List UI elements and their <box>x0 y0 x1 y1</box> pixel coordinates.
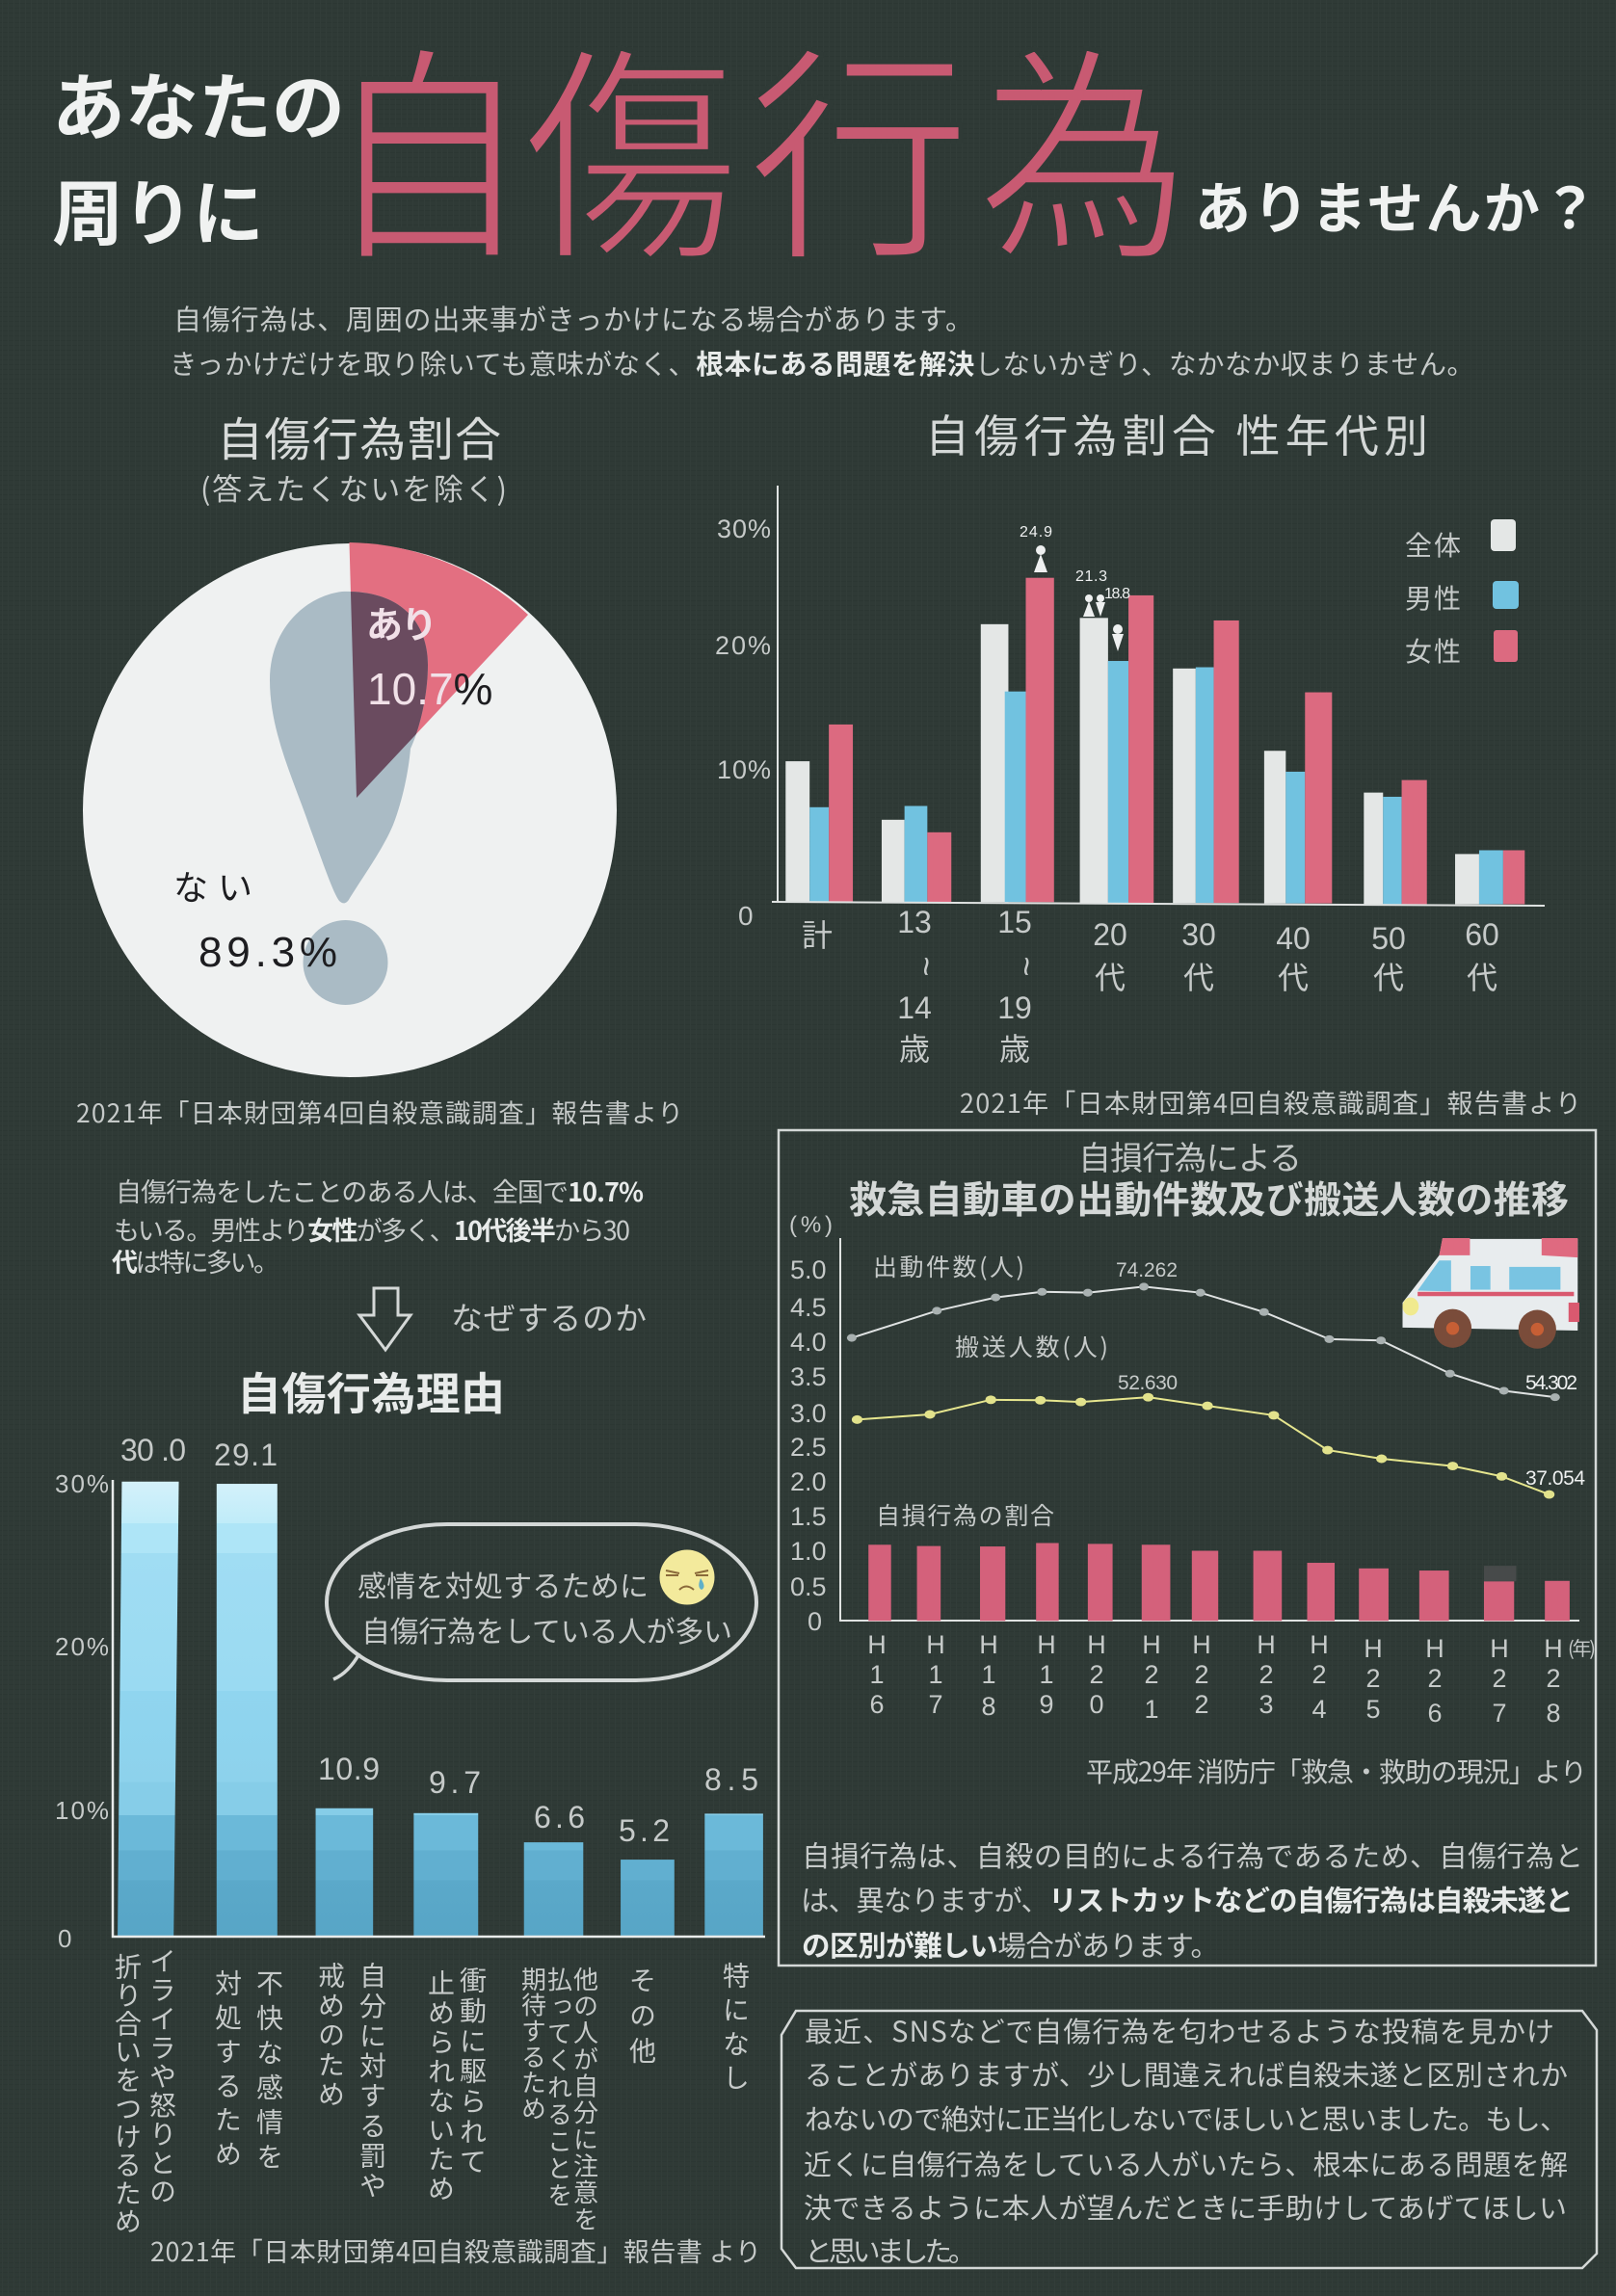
y axis labels: 4.5 <box>790 1293 827 1322</box>
x axis labels: 1 <box>869 1660 885 1689</box>
bars <box>118 1482 763 1937</box>
x axis labels: 2 <box>1258 1660 1274 1689</box>
category labels: 19 <box>997 990 1032 1025</box>
bubble text: 自傷行為をしている人が多い <box>361 1608 732 1650</box>
value labels: 9.7 <box>429 1765 481 1800</box>
category labels: 不快な感情を <box>251 1969 289 2170</box>
panel body text: 自損行為は、自殺の目的による行為であるため、自傷行為と <box>802 1834 1583 1875</box>
category labels: 自分に対する罰や <box>354 1962 392 2199</box>
panel body text: の区別が難しい場合があります。 <box>802 1924 1219 1965</box>
x axis labels: 8 <box>1546 1699 1561 1728</box>
category labels: 折り合いをつけるため <box>109 1953 147 2234</box>
panel: author comment <box>782 2010 1597 2270</box>
panel title: 救急自動車の出動件数及び搬送人数の推移 <box>849 1171 1569 1225</box>
heading: age chart: 自傷行為割合 性年代別 <box>925 402 1428 465</box>
x axis labels: 2 <box>1427 1664 1443 1693</box>
panel: ambulance dispatch <box>779 1130 1596 1966</box>
value labels <box>120 1433 758 1848</box>
pie label: no: ない <box>173 860 252 910</box>
y axis labels: 10% <box>717 755 771 784</box>
x axis labels: H <box>1087 1630 1106 1659</box>
category labels: 30 <box>1181 917 1216 952</box>
y axis labels: 30% <box>55 1469 109 1498</box>
comment text <box>804 2010 1568 2270</box>
category labels: 60 <box>1465 917 1499 952</box>
x axis labels: 2 <box>1546 1664 1561 1693</box>
category labels <box>802 905 1499 1069</box>
category labels: その他 <box>623 1966 662 2064</box>
x unit: (年) <box>1568 1633 1596 1661</box>
x axis labels: H <box>1192 1630 1211 1659</box>
peak value callouts: 24.9 <box>1020 524 1052 541</box>
source: pie: 2021年「日本財団第4回自殺意識調査」報告書より <box>76 1093 683 1130</box>
icon: exclamation mark <box>270 592 428 1005</box>
text: why: なぜするのか <box>451 1293 647 1339</box>
category labels: 歳 <box>899 1025 930 1069</box>
y axis labels: 0 <box>58 1924 71 1953</box>
source: reasons chart: 2021年「日本財団第4回自殺意識調査」報告書 より <box>150 2231 761 2269</box>
axes <box>840 1238 1579 1621</box>
panel title <box>849 1132 1569 1225</box>
y axis labels: 1.5 <box>790 1502 827 1531</box>
y unit: (%) <box>789 1212 833 1238</box>
y axis labels: 4.0 <box>790 1328 827 1357</box>
category labels: イライラや怒りとの <box>144 1947 182 2204</box>
comment text: ねないので絶対に正当化しないでほしいと思いました。もし、 <box>805 2098 1568 2138</box>
panel source: 平成29年 消防庁「救急・救助の現況」より <box>1086 1752 1587 1790</box>
pie label: yes: 10.7% <box>367 664 492 714</box>
x axis labels: 3 <box>1258 1690 1274 1719</box>
category labels: 40 <box>1276 921 1311 956</box>
comment text: 最近、SNSなどで自傷行為を匂わせるような投稿を見かけ <box>805 2010 1554 2050</box>
x axis labels: 2 <box>1492 1664 1507 1693</box>
x axis labels <box>867 1630 1563 1728</box>
x axis labels: 1 <box>928 1660 943 1689</box>
x axis labels: 8 <box>981 1692 996 1721</box>
value labels: 8.5 <box>704 1762 758 1797</box>
heading: reasons: 自傷行為理由 <box>237 1359 505 1423</box>
category labels: 払ってくれることを <box>542 1966 578 2207</box>
line and bar series <box>847 1282 1570 1621</box>
y axis labels: 3.0 <box>790 1399 827 1428</box>
y axis labels: 3.5 <box>790 1362 827 1391</box>
comment text: 決できるように本人が望んだときに手助けしてあげてほしい <box>804 2186 1567 2227</box>
y axis labels: 5.0 <box>790 1255 827 1284</box>
y axis labels: 20% <box>55 1632 109 1661</box>
x axis labels: 2 <box>1089 1660 1104 1689</box>
category labels: 止められないため <box>422 1969 461 2202</box>
series labels: 出動件数(人) <box>873 1249 1024 1283</box>
heading: pie <box>200 402 507 509</box>
y axis labels: 10% <box>55 1796 109 1825</box>
peak value callouts: 21.3 <box>1075 568 1107 585</box>
value labels: 52.630 <box>1118 1372 1178 1394</box>
x axis labels: 1 <box>1039 1660 1054 1689</box>
category labels: 期待するため <box>517 1966 551 2121</box>
legend <box>1405 519 1519 670</box>
peak value callouts: 18.8 <box>1104 586 1130 602</box>
category labels: 14 <box>897 990 932 1025</box>
bars <box>785 578 1524 904</box>
category labels: 対処するため <box>209 1969 248 2167</box>
pie label: no: 89.3% <box>199 929 337 976</box>
x axis labels: 6 <box>869 1690 885 1719</box>
comment frame <box>782 2011 1597 2268</box>
x axis labels: 2 <box>1144 1660 1159 1689</box>
comment text: ることがありますが、少し間違えれば自殺未遂と区別されか <box>805 2053 1568 2094</box>
x axis labels: H <box>1142 1630 1161 1659</box>
intro text: きっかけだけを取り除いても意味がなく、根本にある問題を解決しないかぎり、なかなか収まりません。 <box>170 343 1474 383</box>
panel body text: は、異なりますが、リストカットなどの自傷行為は自殺未遂と <box>801 1879 1574 1919</box>
heading: pie: 自傷行為割合 <box>217 402 501 469</box>
arrow: down <box>359 1288 411 1350</box>
intro text <box>170 298 1474 383</box>
title main: 自傷行為 <box>326 0 1190 306</box>
pie: yes slice <box>349 542 528 798</box>
x axis labels: H <box>1364 1634 1383 1663</box>
bubble text: 感情を対処するために <box>358 1563 649 1605</box>
x axis labels: 5 <box>1365 1695 1381 1724</box>
value labels: 37.054 <box>1525 1467 1585 1490</box>
panel title: 自損行為による <box>1078 1132 1302 1179</box>
heading: pie: (答えたくないを除く) <box>200 465 507 509</box>
value labels: 74.262 <box>1116 1259 1178 1281</box>
category labels: 15 <box>997 905 1032 939</box>
pie label: yes: あり <box>366 595 437 648</box>
category labels: 衝動に駆られて <box>454 1966 492 2175</box>
value labels: 54.302 <box>1525 1372 1577 1394</box>
x axis labels: 7 <box>1492 1699 1507 1728</box>
y axis labels: 2.5 <box>790 1433 827 1462</box>
title lead: あなたの: あなたの <box>52 49 345 155</box>
category labels: 代 <box>1183 954 1214 998</box>
value labels: 30 .0 <box>120 1433 186 1467</box>
legend: 男性 <box>1405 578 1461 617</box>
pie: none segment <box>83 543 617 1077</box>
value labels: 5.2 <box>619 1813 670 1848</box>
y axis labels: 0 <box>738 901 754 931</box>
category labels: 代 <box>1467 954 1497 998</box>
icon: crying face <box>659 1549 715 1605</box>
pie chart <box>83 542 617 1077</box>
bar chart: reasons <box>55 1433 765 2234</box>
category labels: 歳 <box>999 1025 1030 1069</box>
category labels: 代 <box>1278 954 1309 998</box>
x axis labels: 2 <box>1311 1660 1327 1689</box>
intro text: 自傷行為は、周囲の出来事がきっかけになる場合があります。 <box>173 298 973 338</box>
x axis labels: H <box>926 1630 945 1659</box>
category labels: 他の人が自分に注意を <box>569 1966 603 2231</box>
pie label: no <box>173 860 337 976</box>
category labels: ~ <box>907 956 946 977</box>
line: dispatches <box>847 1282 1560 1401</box>
category labels: 代 <box>1373 954 1404 998</box>
x axis labels: H <box>867 1630 887 1659</box>
icon: ambulance <box>1402 1238 1579 1349</box>
series labels <box>873 1249 1108 1532</box>
y axis labels: 0.5 <box>790 1572 827 1601</box>
x axis labels: 9 <box>1039 1690 1054 1719</box>
summary text: 代は特に多い。 <box>112 1242 279 1280</box>
value labels <box>1116 1259 1585 1490</box>
legend: 全体 <box>1405 525 1461 564</box>
x axis labels: 0 <box>1089 1690 1104 1719</box>
y axis labels: 30% <box>717 515 771 543</box>
x axis labels: 4 <box>1311 1695 1327 1724</box>
comment text: 近くに自傷行為をしている人がいたら、根本にある問題を解 <box>804 2143 1568 2183</box>
category labels: 50 <box>1371 921 1406 956</box>
y axis labels: 20% <box>715 631 771 660</box>
summary text: 自傷行為をしたことのある人は、全国で10.7% <box>116 1172 644 1209</box>
category labels: 計 <box>802 911 833 956</box>
bubble tail <box>333 1653 359 1679</box>
comment text: と思いました。 <box>805 2230 976 2270</box>
y axis labels: 1.0 <box>790 1537 827 1566</box>
category labels <box>109 1947 755 2234</box>
x axis labels: H <box>1257 1630 1276 1659</box>
x axis labels: H <box>979 1630 998 1659</box>
category labels: 特になし <box>717 1962 755 2091</box>
x axis labels: 7 <box>928 1690 943 1719</box>
x axis labels: H <box>1425 1634 1444 1663</box>
share bars <box>868 1543 1570 1621</box>
series labels: 自損行為の割合 <box>876 1497 1054 1532</box>
source: age chart: 2021年「日本財団第4回自殺意識調査」報告書より <box>960 1083 1581 1121</box>
x axis labels: 1 <box>1144 1695 1159 1724</box>
series labels: 搬送人数(人) <box>955 1329 1108 1363</box>
panel body text <box>801 1834 1583 1965</box>
summary text <box>112 1172 644 1280</box>
icons: female and male figures <box>1034 545 1124 651</box>
x axis labels: 2 <box>1194 1690 1209 1719</box>
x axis labels: 6 <box>1427 1699 1443 1728</box>
y axis labels <box>790 1255 827 1636</box>
value labels: 6.6 <box>534 1800 585 1834</box>
x axis labels: 1 <box>981 1660 996 1689</box>
x axis labels: 2 <box>1194 1660 1209 1689</box>
callout bubble <box>327 1524 756 1680</box>
value labels: 29.1 <box>214 1438 278 1472</box>
value labels: 10.9 <box>318 1752 380 1786</box>
title <box>52 0 1598 306</box>
title lead: 周りに: 周りに <box>52 157 264 260</box>
bar chart: by sex and age <box>715 486 1545 1069</box>
y axis labels: 0 <box>808 1607 822 1636</box>
legend: 女性 <box>1405 631 1461 670</box>
category labels: 13 <box>897 905 932 939</box>
x axis labels: 2 <box>1365 1664 1381 1693</box>
y axis labels: 2.0 <box>790 1467 827 1496</box>
category labels: 戒めのため <box>312 1962 351 2107</box>
line: transported <box>852 1393 1554 1499</box>
x axis labels: H <box>1037 1630 1056 1659</box>
summary text: もいる。男性より女性が多く、10代後半から30 <box>114 1210 630 1248</box>
axes <box>772 486 1545 906</box>
category labels: ~ <box>1007 956 1046 977</box>
x axis labels: H <box>1310 1630 1329 1659</box>
bubble text <box>358 1563 732 1650</box>
category labels: 20 <box>1093 917 1127 952</box>
panel frame <box>779 1130 1596 1966</box>
category labels: 代 <box>1095 954 1126 998</box>
peak value callouts <box>1020 524 1130 602</box>
x axis labels: H <box>1490 1634 1509 1663</box>
y axis labels <box>715 515 771 931</box>
title tail: ありませんか？: ありませんか？ <box>1195 164 1598 245</box>
y axis labels <box>55 1469 109 1953</box>
pie label: yes <box>366 595 492 714</box>
x axis labels: H <box>1544 1634 1563 1663</box>
axes <box>113 1480 765 1937</box>
